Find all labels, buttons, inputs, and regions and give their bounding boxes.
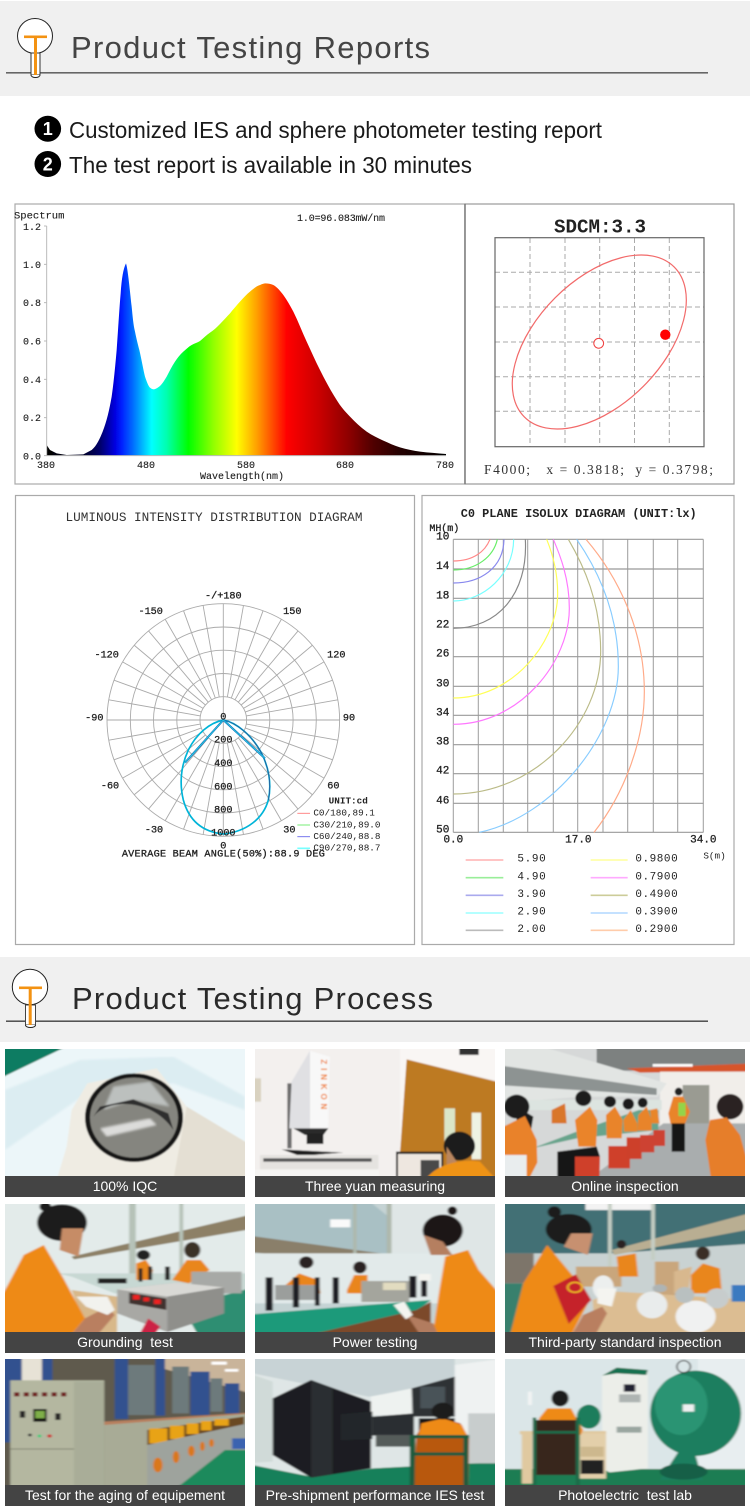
spectrum labels: 1.2 [23, 223, 41, 234]
test chamber [273, 1380, 371, 1478]
spectrum labels: 1.0=96.083mW/nm [297, 213, 385, 225]
spectrum labels: 1.0 [23, 261, 41, 272]
polar labels: 120 [327, 651, 345, 662]
polar labels: 200 [214, 736, 232, 747]
polar legend: UNIT:cd [329, 796, 368, 807]
panel: SDCM chromaticity chart [465, 204, 734, 484]
isolux axis labels: 10 [436, 531, 449, 543]
spectrum labels: Wavelength(nm) [200, 471, 284, 483]
caption [255, 1485, 495, 1506]
isolux axis labels: 18 [436, 590, 449, 602]
polar labels: 1000 [211, 829, 236, 840]
polar labels: 0 [220, 841, 226, 852]
polar labels: 90 [343, 713, 355, 724]
section header: Product Testing Reports [0, 1, 750, 96]
spectrum labels: 380 [37, 461, 55, 472]
isolux axis labels: 14 [436, 561, 450, 573]
isolux axis labels: MH(m) [429, 523, 459, 534]
lamps [637, 1292, 667, 1318]
photo card: Grounding test [0, 1197, 256, 1353]
worker [432, 1250, 505, 1340]
isolux legend: S(m) [703, 851, 726, 862]
caption: Photoelectric test lab [558, 1487, 692, 1503]
polar labels: -30 [145, 825, 163, 836]
list item 1: 1 [43, 119, 53, 139]
polar legend [297, 796, 381, 854]
spectrum labels: 0.6 [23, 338, 41, 348]
caption [5, 1332, 245, 1353]
polar labels: AVERAGE BEAM ANGLE(50%):88.9 DEG [122, 849, 325, 861]
spectrum labels: 0.8 [23, 299, 41, 310]
polar legend: C30/210,89.0 [313, 819, 381, 830]
SDCM heading: SDCM:3.3 [554, 216, 646, 238]
polar grid [107, 604, 340, 836]
isolux legend: 0.9800 [635, 854, 678, 866]
spectrum labels: 0.0 [23, 452, 41, 464]
isolux axis labels: 0.0 [443, 835, 463, 847]
isolux axis labels: 34.0 [690, 835, 717, 847]
isolux legend: 0.7900 [635, 871, 678, 883]
polar labels: -90 [85, 713, 103, 724]
photo card: Pre-shipment performance IES test [244, 1352, 505, 1506]
caption: Third-party standard inspection [528, 1334, 722, 1350]
polar labels: -60 [101, 782, 119, 793]
list item 1: Customized IES and sphere photometer testing report [69, 117, 603, 143]
spectrum labels: 0.2 [23, 414, 41, 425]
isolux legend: 4.90 [517, 871, 546, 883]
caption [255, 1332, 495, 1353]
polar labels [85, 590, 355, 861]
caption [505, 1332, 745, 1353]
polar diagram heading: LUMINOUS INTENSITY DISTRIBUTION DIAGRAM [66, 510, 362, 525]
instrument [361, 1281, 409, 1302]
section header: Product Testing Process [0, 957, 750, 1042]
title: Product Testing Process [72, 981, 433, 1016]
caption: 100% IQC [93, 1178, 157, 1194]
polar labels: 30 [283, 825, 295, 836]
caption: Grounding test [77, 1334, 173, 1350]
chromaticity coordinates: F4000; x = 0.3818; y = 0.3798; [484, 462, 713, 477]
isolux heading: C0 PLANE ISOLUX DIAGRAM (UNIT:lx) [461, 507, 697, 521]
feature list [34, 116, 603, 178]
spectrum labels [14, 210, 454, 483]
photo card: Three yuan measuring: ZINKON [319, 1059, 328, 1110]
caption: Pre-shipment performance IES test [266, 1487, 484, 1503]
caption: Online inspection [571, 1178, 679, 1194]
desk [520, 1431, 606, 1434]
caption [505, 1176, 745, 1197]
panel: luminous intensity distribution [16, 496, 414, 944]
polar labels: 60 [327, 782, 339, 793]
caption: Test for the aging of equipement [25, 1487, 225, 1503]
spectrum labels: 0.4 [23, 376, 41, 387]
spectrum labels: 580 [237, 461, 255, 472]
panel: isolux diagram [422, 496, 734, 944]
caption [5, 1485, 245, 1506]
oven [104, 1413, 256, 1493]
icon: magnifier bulb [12, 969, 48, 1028]
stools [575, 1157, 600, 1183]
panel: spectrum chart [14, 204, 465, 484]
list item 2: 2 [43, 154, 53, 174]
polar labels: -120 [94, 651, 119, 662]
isolux legend: 2.90 [517, 907, 546, 919]
isolux legend: 0.4900 [635, 889, 678, 901]
isolux legend: 0.2900 [635, 924, 678, 936]
isolux axis labels: 17.0 [565, 835, 592, 847]
photo card: Third-party standard inspection [494, 1197, 750, 1353]
caption [505, 1485, 745, 1506]
polar labels: 0 [220, 712, 226, 723]
right workers [717, 1094, 743, 1119]
caption [255, 1176, 495, 1197]
isolux legend: 3.90 [517, 889, 546, 901]
icon: magnifier bulb [18, 18, 52, 78]
isolux legend [466, 851, 726, 936]
list item 2: The test report is available in 30 minutes [69, 152, 472, 178]
isolux axis labels: 30 [436, 678, 449, 690]
ellipse plot [480, 223, 718, 461]
isolux axis labels: 46 [436, 795, 449, 807]
control cabinet [10, 1380, 104, 1494]
spectrum labels: 780 [436, 461, 454, 472]
seated workers [504, 1095, 529, 1119]
title: Product Testing Reports [71, 30, 430, 65]
sphere [650, 1371, 741, 1456]
isolux legend: 2.00 [517, 924, 546, 936]
polar labels: 150 [283, 607, 301, 618]
polar legend: C90/270,88.7 [313, 843, 381, 854]
photo card: Photoelectric test lab [494, 1352, 750, 1506]
polar curves [181, 720, 270, 834]
photo card: Online inspection [497, 1040, 750, 1197]
isolux axis labels: 50 [436, 824, 449, 836]
isolux axis labels: 26 [436, 649, 449, 661]
spectrum curve [44, 226, 446, 456]
operator [413, 1418, 469, 1493]
isolux axis labels: 22 [436, 620, 449, 632]
photo card: Test for the aging of equipement [0, 1352, 256, 1506]
isolux chart [453, 539, 703, 832]
spectrum labels: Spectrum [14, 210, 64, 222]
standing inspector [675, 1088, 683, 1096]
worker [0, 1245, 85, 1340]
isolux legend: 5.90 [517, 854, 546, 866]
isolux axis labels [429, 523, 717, 847]
instrument [117, 1283, 224, 1332]
photo card: 100% IQC [0, 1040, 253, 1197]
polar legend: C0/180,89.1 [313, 808, 375, 819]
back workers [286, 1273, 321, 1293]
control cabinet [602, 1368, 648, 1472]
spectrum labels: 480 [137, 461, 155, 472]
operator [539, 1408, 583, 1435]
worker [509, 1245, 588, 1340]
photo card: Three yuan measuring [247, 1040, 503, 1197]
polar labels: -150 [138, 607, 163, 618]
polar legend: C60/240,88.8 [313, 831, 381, 842]
isolux legend: 0.3900 [635, 907, 678, 919]
isolux axis labels: 38 [436, 737, 449, 749]
polar labels: 800 [214, 805, 232, 816]
polar labels: 400 [214, 759, 232, 770]
caption: Three yuan measuring [305, 1178, 445, 1194]
isolux axis labels: 42 [436, 766, 449, 778]
photo card: Power testing [244, 1197, 505, 1353]
caption [5, 1176, 245, 1197]
spectrum labels: 680 [336, 461, 354, 472]
polar labels: 600 [214, 782, 232, 793]
caption: Power testing [333, 1334, 417, 1350]
polar labels: -/+180 [205, 590, 242, 602]
isolux axis labels: 34 [436, 707, 450, 719]
